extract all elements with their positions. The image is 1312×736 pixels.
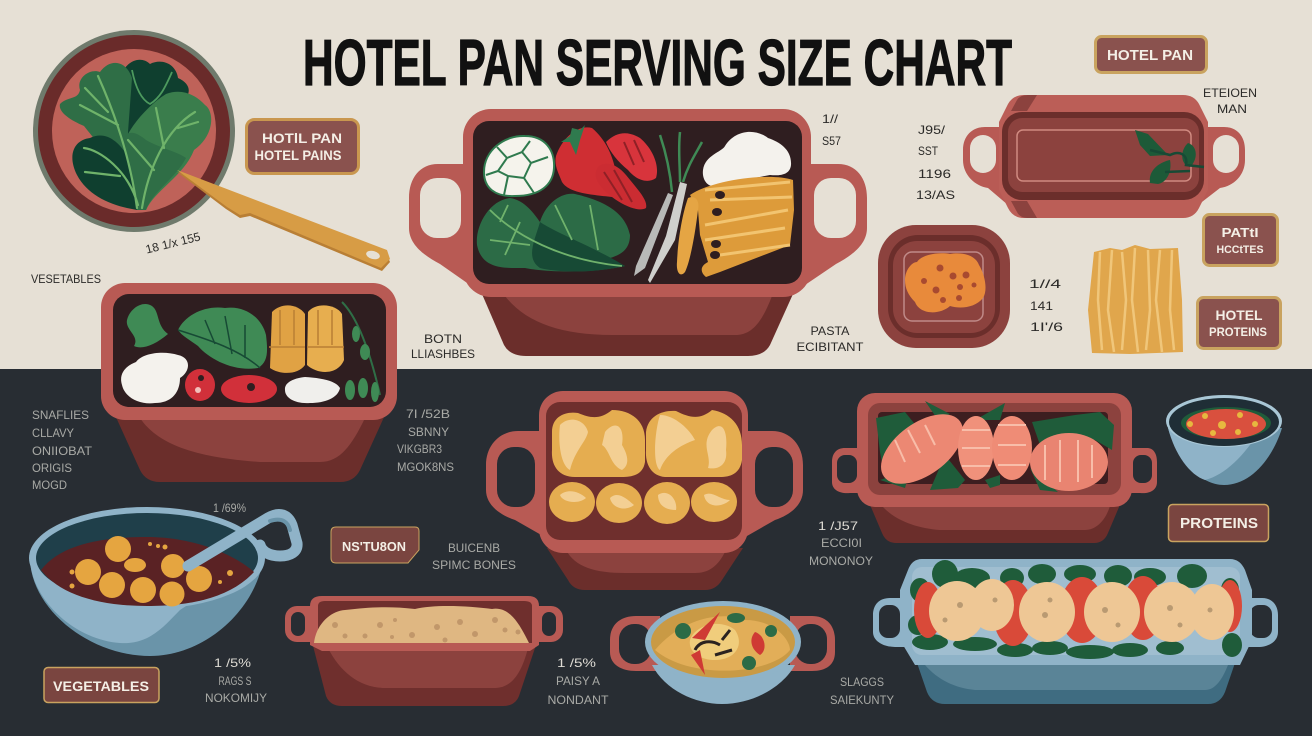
icon: golden serving spatula: [177, 170, 390, 271]
text: pan size top: 1//: [822, 112, 839, 126]
red tomato slice: [185, 369, 215, 401]
text: both caption: BOTN: [424, 332, 462, 346]
text: left dark column: CLLAVY: [32, 426, 74, 440]
salmon fillets: [869, 400, 1108, 498]
text: left sizes for shallow pan: 13/AS: [916, 188, 955, 202]
vegetables caption: VESETABLES: [31, 272, 101, 286]
pasta sheet: [1088, 245, 1183, 354]
proteins hotel pan with salmon: [832, 393, 1157, 543]
text: slaggs caption: SLAGGS: [840, 675, 884, 689]
text: left dark column: ONIIOBAT: [32, 444, 93, 458]
label: pati hoccines: [1204, 214, 1278, 266]
text: quarter-pan sizes: [1029, 277, 1063, 334]
small rolls: [549, 482, 737, 524]
text: pasta mondant caption: [548, 656, 609, 707]
text: right dark column: [397, 407, 454, 474]
text: quarter-pan sizes: 141: [1030, 299, 1053, 313]
tomato and red pepper: [555, 125, 657, 209]
greens under salmon: [876, 401, 1114, 492]
text: left sizes for shallow pan: [916, 123, 955, 202]
text: left sizes for shallow pan: SST: [918, 144, 939, 158]
text: proteins size: [809, 519, 873, 568]
white rice mound: [121, 353, 188, 403]
text: eteioen man: MAN: [1217, 102, 1247, 116]
label: proteins: PROTEINS: [1180, 516, 1258, 532]
rectangular casserole pan: [285, 596, 563, 706]
text: left dark column: [32, 408, 93, 492]
text: both caption: LLIASHBES: [411, 347, 475, 361]
label: hotel pan: [1096, 36, 1206, 72]
label: pati hoccines: PATtI: [1222, 225, 1258, 240]
text: eteioen man: ETEIOEN: [1203, 86, 1257, 100]
text: slaggs caption: SAIEKUNTY: [830, 693, 894, 707]
text: proteins size: ECCI0I: [821, 536, 862, 550]
herb garnish: [1135, 130, 1204, 184]
text: bowl caption: [205, 656, 267, 705]
stuffed rounds: [929, 579, 1234, 642]
text: quarter-pan sizes: 1I'/6: [1030, 320, 1063, 334]
text: left sizes for shallow pan: 1196: [918, 167, 951, 181]
text: pasta caption: ECIBITANT: [796, 340, 864, 354]
text: left dark column: ORIGIS: [32, 461, 72, 475]
corn: [269, 305, 344, 373]
dumplings: [70, 536, 233, 606]
background: cream upper section: [0, 0, 1312, 369]
text: pasta mondant caption: 1 /5%: [557, 656, 596, 670]
cauliflower: [484, 136, 554, 196]
text: buicenb caption: SPIMC BONES: [432, 558, 516, 572]
center hotel pan with baked rolls: [486, 391, 803, 590]
text: pan size top: S57: [822, 134, 841, 148]
text: right dark column: VIKGBR3: [397, 442, 442, 456]
label: hotel pans: [246, 120, 358, 174]
text: proteins size: MONONOY: [809, 554, 873, 568]
round plate with leafy greens: [33, 30, 235, 232]
cream sauce: [703, 132, 791, 186]
label: vegetables: VEGETABLES: [53, 678, 149, 694]
stir fry: [655, 612, 790, 675]
text: proteins size: 1 /J57: [818, 519, 858, 533]
red pepper oval: [221, 375, 277, 403]
size note under plate: 18 1/x 155: [144, 229, 202, 257]
label: hotel proteins: HOTEL: [1216, 308, 1262, 323]
spinach border: [908, 560, 1242, 659]
text: buicenb caption: BUICENB: [448, 541, 500, 555]
small blue bowl with salsa: [1166, 395, 1282, 485]
scallions: [634, 132, 702, 283]
text: left dark column: MOGD: [32, 478, 67, 492]
text: slaggs caption: [830, 675, 894, 707]
text: both caption: [411, 332, 475, 361]
text: pasta caption: [796, 324, 864, 354]
label: nstuson: NS'TU8ON: [342, 540, 406, 554]
label: vegetables: [44, 668, 159, 702]
left hotel pan with assorted vegetables: [101, 283, 397, 482]
herb sprig: [342, 302, 380, 402]
text: bowl caption: NOKOMIJY: [205, 691, 267, 705]
text: bowl size: 1 /69%: [213, 501, 246, 515]
text: quarter-pan sizes: 1//4: [1029, 277, 1062, 291]
text: pan size top: [822, 112, 841, 148]
text: left sizes for shallow pan: J95/: [918, 123, 946, 137]
text: right dark column: MGOK8NS: [397, 460, 454, 474]
text: pasta mondant caption: NONDANT: [548, 693, 609, 707]
long blue pan with stuffed slices: [873, 559, 1278, 704]
ladle: [188, 514, 297, 566]
label: hotel pans: HOTlL PAN: [262, 130, 342, 146]
label: proteins: [1168, 504, 1268, 542]
text: bowl caption: 1 /5%: [214, 656, 251, 670]
text: pasta mondant caption: PAISY A: [556, 674, 600, 688]
text: left dark column: SNAFLIES: [32, 408, 89, 422]
blue bowl with stir fry and red handles: [610, 601, 835, 704]
label: pati hoccines: HCCtTES: [1216, 244, 1264, 256]
text: bowl caption: RAGS S: [218, 674, 252, 688]
background: charcoal lower section: [0, 369, 1312, 736]
leafy greens: [477, 194, 630, 272]
white cheese: [285, 377, 340, 403]
label: nstuson: [331, 527, 419, 563]
large blue bowl with dumplings and ladle: [29, 507, 297, 656]
penne pasta: [677, 177, 794, 277]
small square pan with orange food: [878, 225, 1010, 348]
text: right dark column: SBNNY: [408, 425, 449, 439]
label: hotel pans: HOTEL PAINS: [254, 147, 342, 163]
label: hotel pan: HOTEL PAN: [1107, 48, 1193, 64]
grain topping: [314, 606, 529, 643]
tomato slices: [914, 576, 1242, 646]
text: eteioen man: [1203, 86, 1257, 116]
pan handles and body: [409, 109, 867, 356]
large hotel pan with mixed ingredients: [409, 109, 867, 356]
label: hotel proteins: PROTEINS: [1209, 327, 1267, 339]
shallow hotel pan top right: [963, 95, 1245, 218]
text: right dark column: 7I /52B: [406, 407, 450, 421]
greens: [127, 304, 267, 369]
label: hotel proteins: [1198, 298, 1280, 348]
text: buicenb caption: [432, 541, 516, 572]
text: pasta caption: PASTA: [810, 324, 850, 338]
large rolls: [552, 410, 742, 477]
